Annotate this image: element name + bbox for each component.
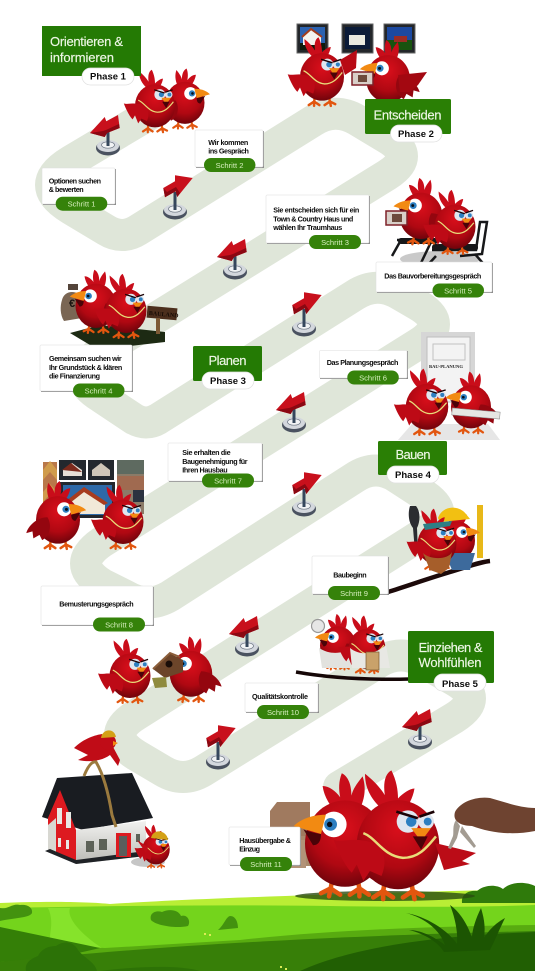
- step 9 card: Schritt 9: [340, 589, 368, 598]
- birds: land and money: BAULAND: [149, 311, 179, 319]
- step 7 card: Sie erhalten die: [182, 448, 231, 457]
- step 5 card: Schritt 5: [444, 286, 472, 296]
- step 4 card: Gemeinsam suchen wir: [49, 354, 122, 363]
- step 2 card: Wir kommen: [208, 138, 248, 147]
- birds: couple at phase 1: [124, 68, 210, 132]
- step 3 card: Sie entscheiden sich für ein: [273, 206, 359, 214]
- signpost arrow 7: [229, 616, 259, 656]
- signpost arrow 6: [292, 472, 322, 516]
- bush small: [218, 916, 238, 930]
- step 2 card: [195, 130, 264, 172]
- phase 2 heading: Entscheiden: [374, 108, 442, 122]
- birds: land and money: [61, 270, 179, 346]
- phase 5 heading: [408, 631, 494, 691]
- phase 3 heading: Planen: [208, 353, 246, 368]
- step 4 card: die Finanzierung: [49, 372, 100, 380]
- phase 5 heading: Wohlfühlen: [418, 655, 482, 670]
- step 5 card: [376, 262, 493, 298]
- step 4 card: Schritt 4: [85, 386, 112, 396]
- birds: construction on branch: [388, 505, 490, 592]
- door with bau-planung sign: [421, 332, 475, 402]
- small bird with helmet: [131, 825, 170, 868]
- big birds on the grass: [294, 770, 476, 901]
- step 6 card: Das Planungsgespräch: [327, 358, 398, 367]
- door with bau-planung sign: BAU-PLANUNG: [429, 364, 463, 369]
- rope and house: [42, 762, 153, 864]
- signpost arrow 9: [402, 709, 432, 750]
- birds: planning: [394, 369, 500, 440]
- step 1 card: [42, 168, 116, 211]
- phase 1 heading: [42, 26, 141, 85]
- signpost arrow 2: [163, 175, 193, 220]
- step 7 card: Ihren Hausbau: [182, 466, 228, 474]
- house photo frames: [297, 24, 415, 53]
- step 4 card: [40, 345, 133, 398]
- bush right: [462, 883, 535, 903]
- moving box behind bird: [270, 802, 322, 868]
- phase 2 heading: [365, 99, 451, 142]
- step 7 card: Baugenehmigung für: [182, 457, 248, 466]
- yellow flower dots: [204, 933, 287, 970]
- step 6 card: [320, 350, 408, 384]
- step 1 card: & bewerten: [49, 185, 84, 194]
- phase 2 heading: Phase 2: [398, 129, 434, 140]
- step 10 card: Qualitätskontrolle: [252, 692, 308, 701]
- phase 4 heading: Phase 4: [395, 470, 432, 481]
- phase 4 heading: [378, 441, 447, 483]
- signpost arrow 5: [276, 392, 306, 432]
- step 2 card: Schritt 2: [216, 161, 243, 170]
- grass landscape: [0, 883, 535, 971]
- step 8 card: [41, 586, 154, 632]
- step 8 card: Bemusterungsgespräch: [59, 600, 134, 608]
- step 10 card: Schritt 10: [267, 708, 299, 717]
- signpost arrow 4: [292, 292, 322, 336]
- phase 3 heading: Phase 3: [210, 376, 246, 387]
- sample wall and birds: [26, 460, 144, 549]
- step 3 card: Schritt 3: [321, 238, 349, 247]
- step 2 card: ins Gespräch: [208, 146, 249, 156]
- birds: discussing catalogue: [288, 37, 427, 108]
- phase 5 heading: Einziehen &: [418, 640, 483, 655]
- step 7 card: [168, 443, 263, 488]
- signpost arrow 8: [206, 725, 236, 770]
- step 5 card: Das Bauvorbereitungsgespräch: [384, 272, 481, 280]
- step 11 card: Hausübergabe &: [239, 836, 291, 845]
- winding road path: [51, 114, 470, 787]
- phase 1 heading: Phase 1: [90, 72, 127, 82]
- birds: land and money: €: [69, 298, 75, 310]
- birds: quality inspection on branch: [296, 614, 410, 679]
- bush large: [26, 943, 97, 971]
- phase 1 heading: informieren: [50, 50, 114, 65]
- grass plant: [406, 905, 505, 952]
- step 9 card: [312, 556, 389, 600]
- bush left: [0, 905, 32, 921]
- bush centre: [151, 910, 189, 927]
- step 1 card: Schritt 1: [68, 200, 95, 208]
- phase 3 heading: [193, 346, 262, 389]
- step 7 card: Schritt 7: [214, 476, 242, 486]
- step 9 card: Baubeginn: [333, 570, 367, 580]
- step 4 card: Ihr Grundstück & klären: [49, 363, 122, 372]
- step 11 card: Schritt 11: [250, 860, 282, 869]
- step 1 card: Optionen suchen: [49, 176, 101, 186]
- step 3 card: wählen Ihr Traumhaus: [272, 223, 342, 232]
- birds: seated on chairs: [386, 178, 487, 268]
- step 11 card: Einzug: [239, 844, 260, 854]
- step 3 card: Town & Country Haus und: [273, 214, 353, 224]
- birds: birdhouse and bucket: [98, 636, 222, 703]
- step 10 card: [245, 683, 319, 719]
- step 11 card: [229, 827, 301, 871]
- phase 4 heading: Bauen: [396, 447, 430, 462]
- flying bird carrying the house: [74, 730, 120, 766]
- signpost arrow 3: [217, 239, 247, 280]
- step 3 card: [266, 195, 370, 249]
- phase 1 heading: Orientieren &: [50, 34, 123, 49]
- signpost arrow 1: [90, 115, 120, 156]
- step 6 card: Schritt 6: [359, 374, 387, 382]
- hand with keys: [448, 798, 535, 849]
- step 8 card: Schritt 8: [105, 620, 133, 630]
- phase 5 heading: Phase 5: [442, 679, 479, 690]
